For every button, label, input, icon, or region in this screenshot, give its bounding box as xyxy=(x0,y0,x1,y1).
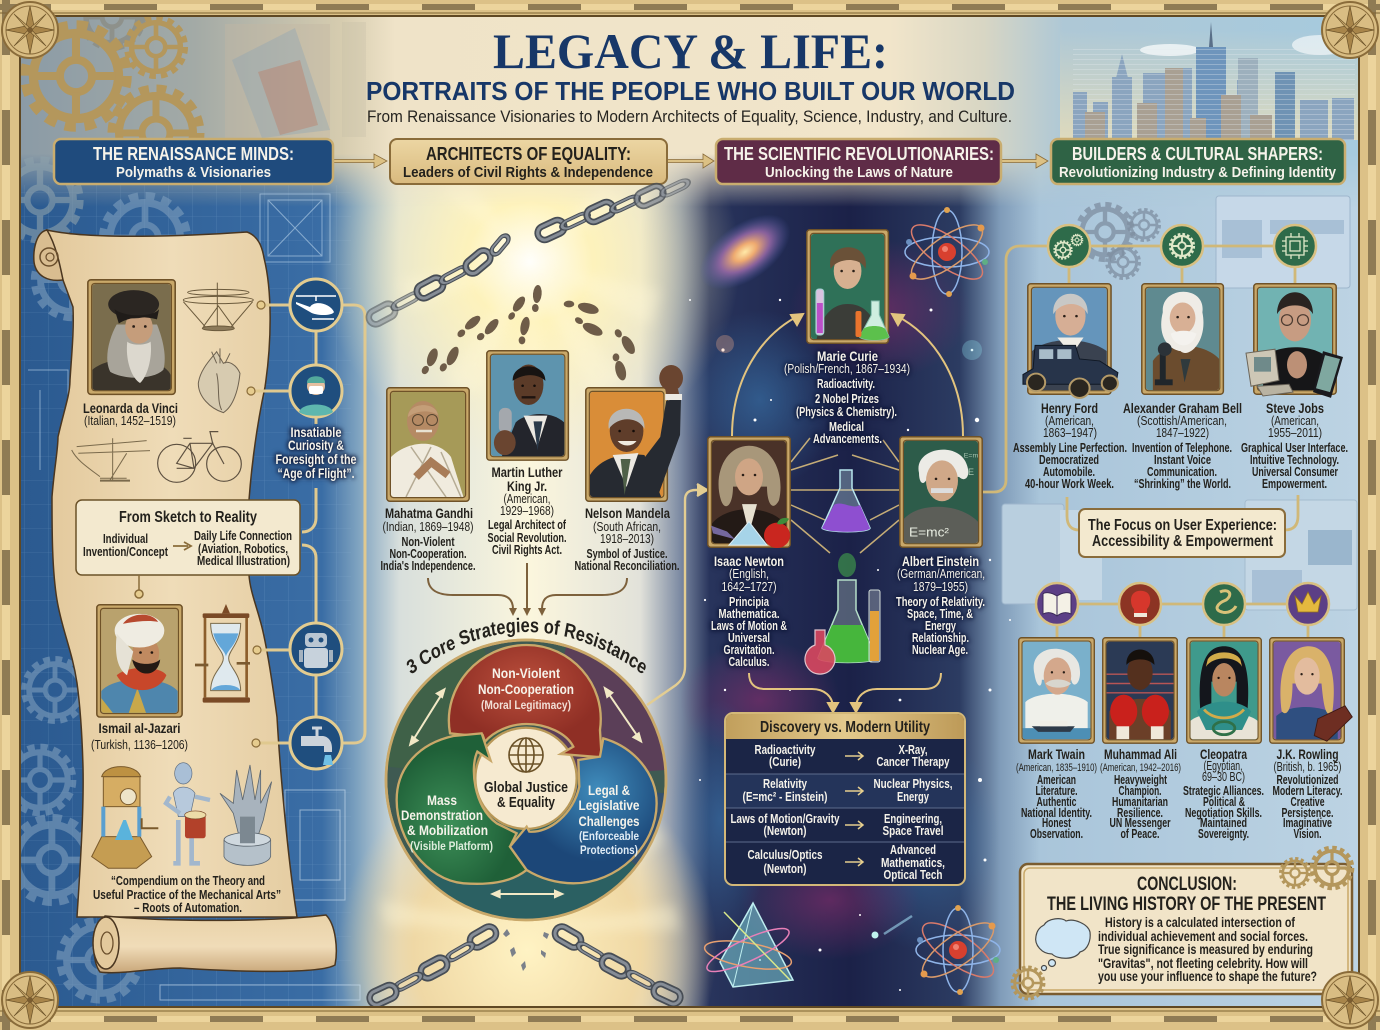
text: Twain: Mark Twain xyxy=(1028,746,1085,762)
connectors: scroll to modern icons xyxy=(255,305,365,743)
text: Curie: Marie Curie xyxy=(817,348,878,364)
scroll bottom roller xyxy=(93,915,336,973)
header parchment background xyxy=(21,17,1358,207)
scroll body xyxy=(47,230,297,917)
text: Einstein: Nuclear Age. xyxy=(912,643,968,657)
table row: laws of motion xyxy=(730,812,944,838)
table row: radioactivity: (Curie) xyxy=(769,755,801,769)
text: compendium note: – Roots of Automation. xyxy=(134,901,242,915)
section header: science: THE SCIENTIFIC REVOLUTIONARIES: xyxy=(724,144,994,164)
text: Twain: Honest xyxy=(1042,816,1072,830)
footprints xyxy=(420,285,638,382)
panel: builders and shapers xyxy=(983,196,1357,998)
text: Bell xyxy=(1123,400,1242,491)
text: Twain: Authentic xyxy=(1036,795,1077,809)
portrait: Ismail al-Jazari xyxy=(96,604,183,718)
broken chain: top xyxy=(366,179,689,327)
text: non-violent segment: Non-Cooperation xyxy=(478,681,574,697)
section header: renaissance: Polymaths & Visionaries xyxy=(116,164,271,181)
text: Mandela: Nelson Mandela xyxy=(585,505,670,521)
portrait: Steve Jobs xyxy=(1246,283,1343,398)
portrait: Isaac Newton xyxy=(707,436,791,548)
icon: serpent xyxy=(1203,583,1245,625)
table row: calculus: Optical Tech xyxy=(884,868,942,882)
portrait: Albert Einstein: E=mc² xyxy=(909,524,950,539)
text: Gandhi: Non-Violent xyxy=(402,535,455,549)
section header: equality: ARCHITECTS OF EQUALITY: xyxy=(426,144,631,164)
text: Rowling: Imaginative xyxy=(1283,816,1332,830)
text: King xyxy=(488,464,567,557)
icon: chip xyxy=(1274,225,1316,267)
table row: calculus: Calculus/Optics xyxy=(748,848,823,862)
text: legal segment: Protections) xyxy=(580,843,638,857)
panel: conclusion xyxy=(1013,848,1352,998)
text: Bell: Instant Voice xyxy=(1154,453,1211,467)
section header: builders: Revolutionizing Industry & Defining Identity xyxy=(1059,164,1337,181)
text: Ford: 1863–1947) xyxy=(1043,426,1097,440)
text: center xyxy=(484,779,568,811)
text: non-violent segment xyxy=(478,665,574,712)
callout: from sketch to reality xyxy=(76,500,300,575)
text: Bell: Alexander Graham Bell xyxy=(1123,400,1242,416)
icon: atom bottom xyxy=(915,905,1001,995)
arrows: leaders to strategies xyxy=(428,563,627,616)
text: al-Jazari name and dates: Ismail al-Jazari xyxy=(98,720,180,736)
connector: wheel to Newton xyxy=(647,484,707,705)
text: Newton xyxy=(711,553,787,669)
text: King: 1929–1968) xyxy=(500,504,554,518)
portrait: Mark Twain xyxy=(1018,637,1095,744)
text: Rowling: Persistence. xyxy=(1282,806,1334,820)
text: Bell: (Scottish/American, xyxy=(1137,414,1227,428)
sketch: robot drummer xyxy=(166,763,210,863)
icon: lab flasks xyxy=(805,553,880,674)
table row: radioactivity: Cancer Therapy xyxy=(876,755,950,769)
table row: radioactivity: X-Ray, xyxy=(898,743,928,757)
corner compass: top left xyxy=(2,2,58,58)
text: Curie xyxy=(784,348,910,446)
text: mass demonstration segment: Demonstration xyxy=(401,807,483,823)
galaxy xyxy=(686,199,804,305)
connector dots xyxy=(247,301,265,747)
text: compendium note: “Compendium on the Theory and xyxy=(111,874,265,888)
text: Curie: (Physics & Chemistry). xyxy=(796,405,897,419)
sketch: water clock xyxy=(92,767,158,868)
text: Cleopatra: (Egyptian, xyxy=(1204,759,1242,773)
table: discovery vs modern utility xyxy=(725,713,965,885)
scroll top curl xyxy=(34,230,63,280)
text: Ali: Muhammad Ali xyxy=(1104,746,1177,762)
text: insatiable curiosity: “Age of Flight”. xyxy=(278,465,354,481)
text: Jobs xyxy=(1241,400,1348,491)
conclusion gears xyxy=(1013,848,1352,998)
text: insatiable curiosity: Curiosity & xyxy=(288,437,344,453)
section header: science: Unlocking the Laws of Nature xyxy=(765,164,953,181)
section header: equality: Leaders of Civil Rights & Independence xyxy=(403,164,653,181)
section header: renaissance: THE RENAISSANCE MINDS: xyxy=(93,144,294,164)
tagline: From Renaissance Visionaries to Modern Architects of Equality, Science, Industry, and Culture. xyxy=(367,107,1012,126)
section header: science xyxy=(716,139,1001,184)
table row: laws of motion: Laws of Motion/Gravity xyxy=(730,812,840,826)
text: Newton: Gravitation. xyxy=(724,643,774,657)
text: Jobs: Empowerment. xyxy=(1262,477,1327,491)
table row: calculus xyxy=(748,843,945,882)
text: Cleopatra: Maintained xyxy=(1200,816,1247,830)
text: King: Social Revolution. xyxy=(488,531,566,545)
text: Ford xyxy=(1013,400,1127,491)
text: Jobs: Intuitive Technology. xyxy=(1250,453,1339,467)
text: Curie: Radioactivity. xyxy=(817,377,875,391)
text: Gandhi: Non-Cooperation. xyxy=(390,547,466,561)
text: Einstein: 1879–1955) xyxy=(913,580,968,594)
conclusion heading: CONCLUSION: xyxy=(1137,874,1237,895)
text: Ali: (American, 1942–2016) xyxy=(1100,762,1181,774)
portrait: Nelson Mandela xyxy=(585,365,683,502)
text: Jobs: Steve Jobs xyxy=(1266,400,1324,416)
panel: 3 core strategies wheel xyxy=(366,618,684,1006)
text: legal segment xyxy=(578,782,640,857)
table header: Discovery vs. Modern Utility xyxy=(760,719,930,736)
callout: from sketch to reality: (Aviation, Robotics, xyxy=(198,542,288,556)
portrait: Alexander Graham Bell xyxy=(1141,283,1224,395)
panel: chains and footprints, equality xyxy=(366,179,689,616)
text: legal segment: Legislative xyxy=(578,797,640,813)
text: mass demonstration segment: Mass xyxy=(427,792,457,808)
icon: atom top xyxy=(904,207,990,297)
text: compendium note: Useful Practice of the Mechanical Arts” xyxy=(93,888,281,902)
text: Mandela: 1918–2013) xyxy=(600,532,654,546)
text: Leonardo name and dates xyxy=(83,400,178,428)
text: Einstein xyxy=(896,553,985,657)
table row: relativity xyxy=(742,777,952,804)
text: insatiable curiosity: Foresight of the xyxy=(276,451,357,467)
title block xyxy=(366,23,1015,126)
text: Newton: Universal xyxy=(728,631,770,645)
text: Rowling: Creative xyxy=(1290,795,1325,809)
portrait: Albert Einstein: E xyxy=(968,467,974,477)
table row: calculus: Mathematics, xyxy=(881,856,945,870)
icon: gears xyxy=(1048,225,1090,267)
text: al-Jazari name and dates xyxy=(91,720,188,752)
callout: from sketch to reality: From Sketch to Reality xyxy=(119,509,257,526)
jobs phone xyxy=(1313,351,1343,398)
text: Ford: (American, xyxy=(1045,414,1094,428)
table row: calculus: (Newton) xyxy=(764,862,806,876)
text: Twain: Literature. xyxy=(1036,784,1078,798)
text: Leonardo name and dates: Leonarda da Vinci xyxy=(83,400,178,416)
portrait: Leonardo da Vinci xyxy=(87,279,176,395)
text: King: Civil Rights Act. xyxy=(492,543,562,557)
text: Newton: 1642–1727) xyxy=(722,580,776,594)
portrait: Martin Luther King Jr. xyxy=(486,350,569,461)
arrows: scientists to table xyxy=(749,673,941,712)
icon: faucet xyxy=(290,717,342,769)
text: Newton: Principia xyxy=(729,595,770,609)
portrait: Albert Einstein xyxy=(899,436,983,548)
section header: builders: BUILDERS & CULTURAL SHAPERS: xyxy=(1072,144,1323,164)
text: Cleopatra: Negotiation Skills. xyxy=(1185,806,1262,820)
arcs: Newton and Einstein to Curie xyxy=(732,314,963,553)
sketch: hourglass xyxy=(195,604,250,703)
text: Einstein: Albert Einstein xyxy=(902,553,979,569)
text: Ford: Assembly Line Perfection. xyxy=(1013,441,1127,455)
text: Curie: Advancements. xyxy=(813,432,882,446)
conclusion body: "Gravitas", not fleeting celebrity. How will xyxy=(1098,955,1308,971)
text: legal segment: (Enforceable xyxy=(579,829,639,843)
text: Curie: 2 Nobel Prizes xyxy=(815,392,879,406)
text: Newton: Mathematica. xyxy=(718,607,780,621)
text: Ali: of Peace. xyxy=(1120,827,1160,841)
table row: relativity: (E=mc² - Einstein) xyxy=(742,790,828,804)
text: Gandhi: (Indian, 1869–1948) xyxy=(382,520,474,534)
text: Cleopatra: Sovereignty. xyxy=(1198,827,1249,841)
text: Bell: Invention of Telephone. xyxy=(1132,441,1232,455)
panel: renaissance scroll xyxy=(34,230,336,973)
icon: thought cloud xyxy=(1036,919,1090,970)
sketch: anatomical heart xyxy=(198,348,240,413)
corner compass: bottom right xyxy=(1322,972,1378,1028)
text: Einstein: Relationship. xyxy=(912,631,969,645)
conclusion body: True significance is measured by enduring xyxy=(1098,941,1313,957)
text: Mandela xyxy=(574,505,680,573)
text: non-violent segment: (Moral Legitimacy) xyxy=(481,698,571,712)
text: Mandela: National Reconciliation. xyxy=(574,559,680,573)
wheel shapes xyxy=(386,640,666,920)
text: legal segment: Legal & xyxy=(588,782,630,798)
text: center: Global Justice xyxy=(484,779,568,796)
callout: user experience: The Focus on User Experience: xyxy=(1088,517,1277,534)
text: Curie: (Polish/French, 1867–1934) xyxy=(784,362,910,376)
table row: relativity: Energy xyxy=(897,790,929,804)
text: Bell: 1847–1922) xyxy=(1156,426,1209,440)
text: King: (American, xyxy=(504,492,550,506)
text: Rowling: Revolutionized xyxy=(1276,773,1338,787)
text: King: King Jr. xyxy=(507,478,547,494)
table row: relativity: Relativity xyxy=(763,777,807,791)
text: Rowling: (British, b. 1965) xyxy=(1274,760,1342,774)
text: Twain: National Identity. xyxy=(1021,806,1092,820)
arrow xyxy=(173,542,191,550)
sketch: bicycle xyxy=(158,432,241,482)
portrait: Marie Curie xyxy=(806,229,889,344)
background blueprint gears, left xyxy=(8,194,360,1000)
corner compass: top right xyxy=(1322,2,1378,58)
text: Rowling: Vision. xyxy=(1294,827,1322,841)
text: Leonardo name and dates: (Italian, 1452–1519) xyxy=(84,414,176,428)
portrait: Cleopatra xyxy=(1186,637,1262,744)
table row: laws of motion: Space Travel xyxy=(882,824,944,838)
text: Cleopatra: Strategic Alliances. xyxy=(1183,784,1264,798)
text: Twain: (American, 1835–1910) xyxy=(1016,762,1097,774)
text: Ford: 40-hour Work Week. xyxy=(1025,477,1114,491)
section header: renaissance xyxy=(54,139,333,184)
section header: equality xyxy=(390,139,667,184)
text: King: Martin Luther xyxy=(492,464,563,480)
icon: prism xyxy=(703,903,793,987)
text: Ali: Resilience. xyxy=(1117,806,1163,820)
portrait: J.K. Rowling xyxy=(1269,637,1352,744)
icon: crown xyxy=(1287,583,1329,625)
text: Ali xyxy=(1100,746,1181,841)
icon: robot xyxy=(290,623,342,675)
panel: scientific revolutionaries xyxy=(686,199,1001,995)
table row: calculus: Advanced xyxy=(890,843,936,857)
text: al-Jazari name and dates: (Turkish, 1136–1206) xyxy=(91,738,188,752)
text: Twain xyxy=(1016,746,1097,841)
text: Gandhi: Mahatma Gandhi xyxy=(385,505,473,521)
mandela raised arm xyxy=(640,397,681,495)
text: non-violent segment: Non-Violent xyxy=(492,665,560,681)
text: insatiable curiosity: Insatiable xyxy=(290,424,342,440)
callout: from sketch to reality: Individual xyxy=(103,532,148,546)
text: Einstein: Energy xyxy=(925,619,956,633)
text: compendium note xyxy=(93,874,281,915)
text: legal segment: Challenges xyxy=(578,813,640,829)
table row: radioactivity xyxy=(754,743,950,769)
conclusion body xyxy=(1098,914,1317,984)
text: Curie: Medical xyxy=(829,420,864,434)
text: Ford: Democratized xyxy=(1039,453,1099,467)
rowling book xyxy=(1314,706,1352,741)
text: Cleopatra xyxy=(1183,746,1264,841)
callout: from sketch to reality: Daily Life Connection xyxy=(194,529,292,543)
skyline, top right xyxy=(1060,22,1358,140)
text: center: & Equality xyxy=(497,794,556,811)
callout: user experience xyxy=(1079,509,1285,557)
connector stem with dot xyxy=(135,575,143,598)
icon: purple flask xyxy=(822,470,870,532)
text: Gandhi: India's Independence. xyxy=(380,559,476,573)
text: Einstein: Theory of Relativity. xyxy=(896,595,985,609)
text: Ali: UN Messenger xyxy=(1110,816,1171,830)
text: Ali: Champion. xyxy=(1118,784,1162,798)
text: Bell: Communication. xyxy=(1147,465,1217,479)
icon: surgeon xyxy=(290,365,342,417)
icon: book xyxy=(1036,583,1078,625)
text: mass demonstration segment: & Mobilization xyxy=(407,822,488,838)
text: Ali: Humanitarian xyxy=(1112,795,1168,809)
icon: gear network xyxy=(1161,225,1203,267)
text: Rowling: J.K. Rowling xyxy=(1276,746,1338,762)
table row: radioactivity: Radioactivity xyxy=(754,743,816,757)
text: Jobs: Universal Consumer xyxy=(1252,465,1338,479)
icon: helicopter xyxy=(290,279,342,331)
text: Jobs: (American, xyxy=(1271,414,1319,428)
text: Ford: Automobile. xyxy=(1043,465,1095,479)
text: Twain: American xyxy=(1037,773,1076,787)
section header: builders xyxy=(1051,139,1345,184)
icon: globe xyxy=(509,738,543,772)
text: mass demonstration segment: (Visible Platform) xyxy=(410,839,493,853)
conclusion heading xyxy=(1047,874,1326,915)
text: Cleopatra: Political & xyxy=(1203,795,1245,809)
text: Newton: Isaac Newton xyxy=(714,553,784,569)
table row: laws of motion: (Newton) xyxy=(764,824,806,838)
ford car xyxy=(1023,345,1118,384)
text: Cleopatra: 69–30 BC) xyxy=(1202,770,1245,784)
broken chain: bottom xyxy=(367,924,683,1007)
table row: relativity: Nuclear Physics, xyxy=(874,777,952,791)
portrait: Muhammad Ali xyxy=(1102,637,1178,744)
text: Newton: Calculus. xyxy=(728,655,770,669)
text: Einstein: (German/American, xyxy=(897,567,985,581)
subtitle: PORTRAITS OF THE PEOPLE WHO BUILT OUR WORLD xyxy=(366,76,1015,106)
sketch: flying machine xyxy=(183,283,253,331)
text: mass demonstration segment xyxy=(401,792,493,853)
table header xyxy=(726,714,964,739)
text: Jobs: 1955–2011) xyxy=(1268,426,1322,440)
portrait: Albert Einstein: E=m xyxy=(964,452,979,459)
conclusion body: History is a calculated intersection of xyxy=(1105,914,1295,930)
text: Cleopatra: Cleopatra xyxy=(1200,746,1247,762)
text: Bell: “Shrinking” the World. xyxy=(1134,477,1231,491)
text: Twain: Observation. xyxy=(1030,827,1083,841)
title: LEGACY & LIFE: xyxy=(493,23,888,79)
text: Newton: (English, xyxy=(729,567,769,581)
text: Mandela: (South African, xyxy=(593,520,661,534)
text: Gandhi xyxy=(380,505,476,573)
wheel heading on arc: 3 Core Strategies of Resistance xyxy=(406,618,646,674)
portrait: Henry Ford xyxy=(1023,283,1118,398)
text: Rowling: Modern Literacy. xyxy=(1272,784,1342,798)
sketch: mechanical hand xyxy=(220,765,272,865)
corner compass: bottom left xyxy=(2,972,58,1028)
portrait: Mahatma Gandhi xyxy=(386,387,470,502)
text: Rowling xyxy=(1272,746,1342,841)
connector lines xyxy=(983,246,1308,637)
text: King: Legal Architect of xyxy=(488,518,567,532)
jobs computer xyxy=(1246,349,1279,386)
text: Ford: Henry Ford xyxy=(1041,400,1098,416)
callout: user experience: Accessibility & Empowerment xyxy=(1092,533,1274,550)
text: Einstein: Space, Time, & xyxy=(907,607,973,621)
background gears and UI windows xyxy=(1002,196,1357,610)
conclusion body: individual achievement and social forces. xyxy=(1098,928,1308,944)
text: Ali: Heavyweight xyxy=(1114,773,1168,787)
section connector arrows xyxy=(333,154,1048,168)
text: Mandela: Symbol of Justice. xyxy=(586,547,668,561)
text: insatiable curiosity xyxy=(276,424,357,481)
table row: laws of motion: Engineering, xyxy=(884,812,942,826)
background gears and fresco, top left xyxy=(1,0,366,239)
sketch: aerial screw xyxy=(72,438,150,481)
icon: boxing glove xyxy=(1119,583,1161,625)
callout: from sketch to reality: Invention/Concept xyxy=(83,545,169,559)
text: Newton: Laws of Motion & xyxy=(711,619,787,633)
callout: from sketch to reality: Medical Illustration) xyxy=(197,554,290,568)
